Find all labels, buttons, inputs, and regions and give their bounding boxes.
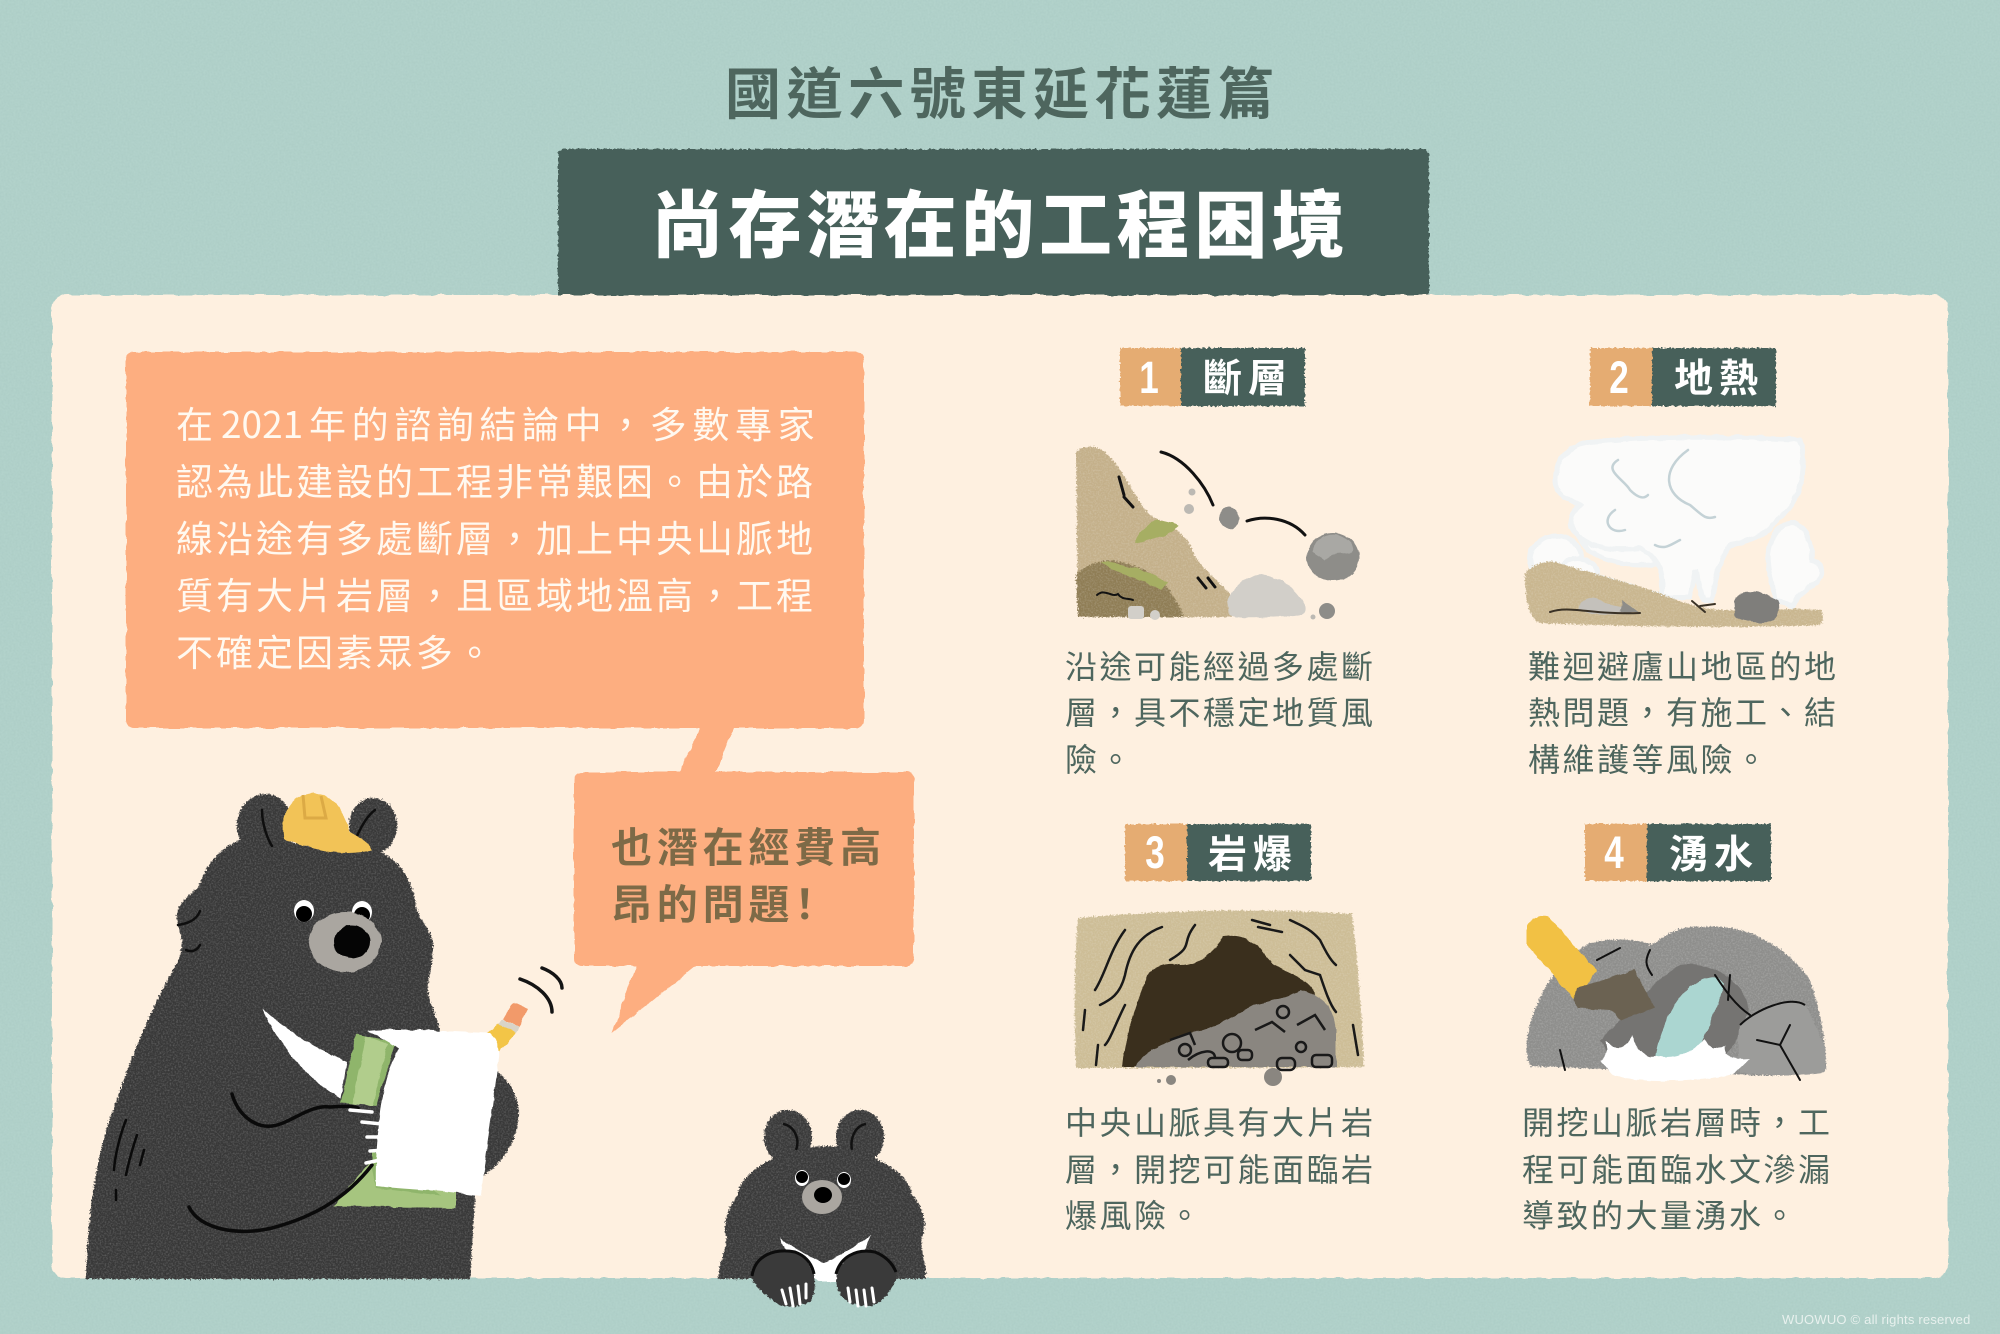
motion lines [520,968,562,1012]
summary text: 不確定因素眾多。 [176,623,496,677]
cost warning text: 昂的問題！ [611,871,830,931]
illustration: bear cub [718,1110,926,1307]
description text: 難迴避廬山地區的地 [1528,642,1839,688]
description text: 導致的大量湧水。 [1522,1191,1798,1237]
panel: speech bubble with summary [126,352,864,772]
description text: 爆風險。 [1065,1191,1203,1237]
banner background [558,149,1429,309]
section 4: water inrush [1522,824,1833,1237]
small debris [1128,488,1335,620]
rock cracks [1560,948,1800,1080]
mountain slope [1076,447,1235,617]
clipboard [333,1034,456,1208]
cub claws [782,1284,874,1306]
label: name: 斷層 [1203,348,1293,404]
tunnel rock face [1075,911,1364,1068]
label: number: 2 [1609,352,1629,403]
fur marks [114,1120,144,1200]
description text: 中央山脈具有大片岩 [1065,1098,1376,1144]
summary text: 線沿途有多處斷層，加上中央山脈地 [176,509,816,563]
illustration: excavator and water [1527,916,1826,1081]
label: number [1585,824,1647,881]
summary text [176,395,820,677]
description text [1065,1098,1376,1237]
label: number [1590,348,1652,406]
title banner [558,149,1429,309]
subtitle heading: 國道六號東延花蓮篇 [725,50,1279,131]
label: name: 地熱 [1674,348,1764,404]
illustration: adult bear with helmet and notepad [86,792,562,1279]
bear ears [237,794,397,856]
eyes [294,900,372,923]
description text: 程可能面臨水文滲漏 [1522,1145,1833,1191]
cub body [718,1146,926,1279]
fallen pebbles [1157,1068,1282,1086]
bear body [86,837,519,1279]
cave cracks [1083,920,1358,1065]
main title: 尚存潛在的工程困境 [651,167,1349,273]
description text [1528,642,1839,781]
steam lines [1608,450,1715,547]
summary text: 認為此建設的工程非常艱困。由於路 [176,452,816,506]
description text: 熱問題，有施工、結 [1528,688,1839,734]
right boulder [1738,1002,1826,1075]
section 1: fault [1065,348,1376,781]
copyright footer: WUOWUO © all rights reserved [1782,1312,1971,1327]
ground cracks [1550,601,1715,613]
helmet detail [303,795,326,818]
description text: 構維護等風險。 [1528,735,1770,781]
panel: main cream card [52,295,1948,1278]
cub paw lines [752,1251,896,1276]
description text: 開挖山脈岩層時，工 [1522,1098,1833,1144]
section 3: rockburst [1065,824,1376,1237]
label: name: 岩爆 [1208,824,1298,880]
description text [1065,642,1376,781]
label: number: 3 [1145,827,1165,878]
notepad paper [367,1029,499,1196]
excavator arm [1527,916,1596,1002]
rock shading [1600,964,1748,1065]
panel: second speech bubble [574,772,914,1033]
rock highlight [1312,535,1353,560]
summary text: 2021 [221,395,303,449]
summary text: 質有大片岩層，且區域地溫高，工程 [176,566,816,620]
small flying rock [1219,507,1239,529]
section 2: geothermal [1525,348,1839,781]
cost warning text [611,814,886,931]
ear and neck lines [178,810,375,951]
bubble shape [574,772,914,1033]
claws [350,1110,387,1163]
label: number: 4 [1604,827,1624,878]
label: name: 湧水 [1669,824,1759,880]
ground [1525,562,1823,627]
large pale rock [1228,574,1306,618]
inner ear lines [783,1124,866,1150]
description text [1522,1098,1833,1237]
dark mound [1076,561,1183,617]
excavator bucket [1574,970,1655,1020]
cub ears [764,1110,884,1164]
illustration: falling rocks [1076,447,1359,620]
description text: 層，具不穩定地質風 [1065,688,1376,734]
green patch [1135,519,1179,543]
rubble pile [1135,990,1336,1067]
motion arcs and cracks [1097,452,1305,600]
splash [1600,1036,1750,1081]
bubble shape [126,352,864,772]
illustration: steam vents [1525,437,1823,627]
hand and arm lines [189,1094,372,1231]
cub chest mark [780,1234,871,1282]
boulder edge [1740,1002,1805,1025]
tunnel opening [1122,936,1336,1067]
summary text: 在 [176,395,216,449]
rock mass [1527,927,1826,1075]
summary text: 年的諮詢結論中，多數專家 [309,395,820,449]
label: number [1125,824,1187,881]
chest white mark [262,1008,347,1098]
water stream [1655,977,1725,1058]
muzzle and nose [309,912,381,972]
illustration: tunnel collapse [1075,911,1364,1086]
steam clouds [1530,437,1822,606]
helmet [283,792,372,853]
description text: 險。 [1065,735,1134,781]
rubble outlines [1170,1006,1332,1070]
label: number: 1 [1139,352,1159,403]
description text: 沿途可能經過多處斷 [1065,642,1376,688]
grey rocks [1578,592,1779,623]
description text: 層，開挖可能面臨岩 [1065,1145,1376,1191]
mound green [1101,562,1168,590]
label: number [1120,348,1182,406]
cost warning text: 也潛在經費高 [611,814,886,874]
cub face [795,1170,851,1214]
flying grey rock [1307,533,1359,581]
cub paws [752,1251,897,1307]
pencil [487,1002,528,1052]
